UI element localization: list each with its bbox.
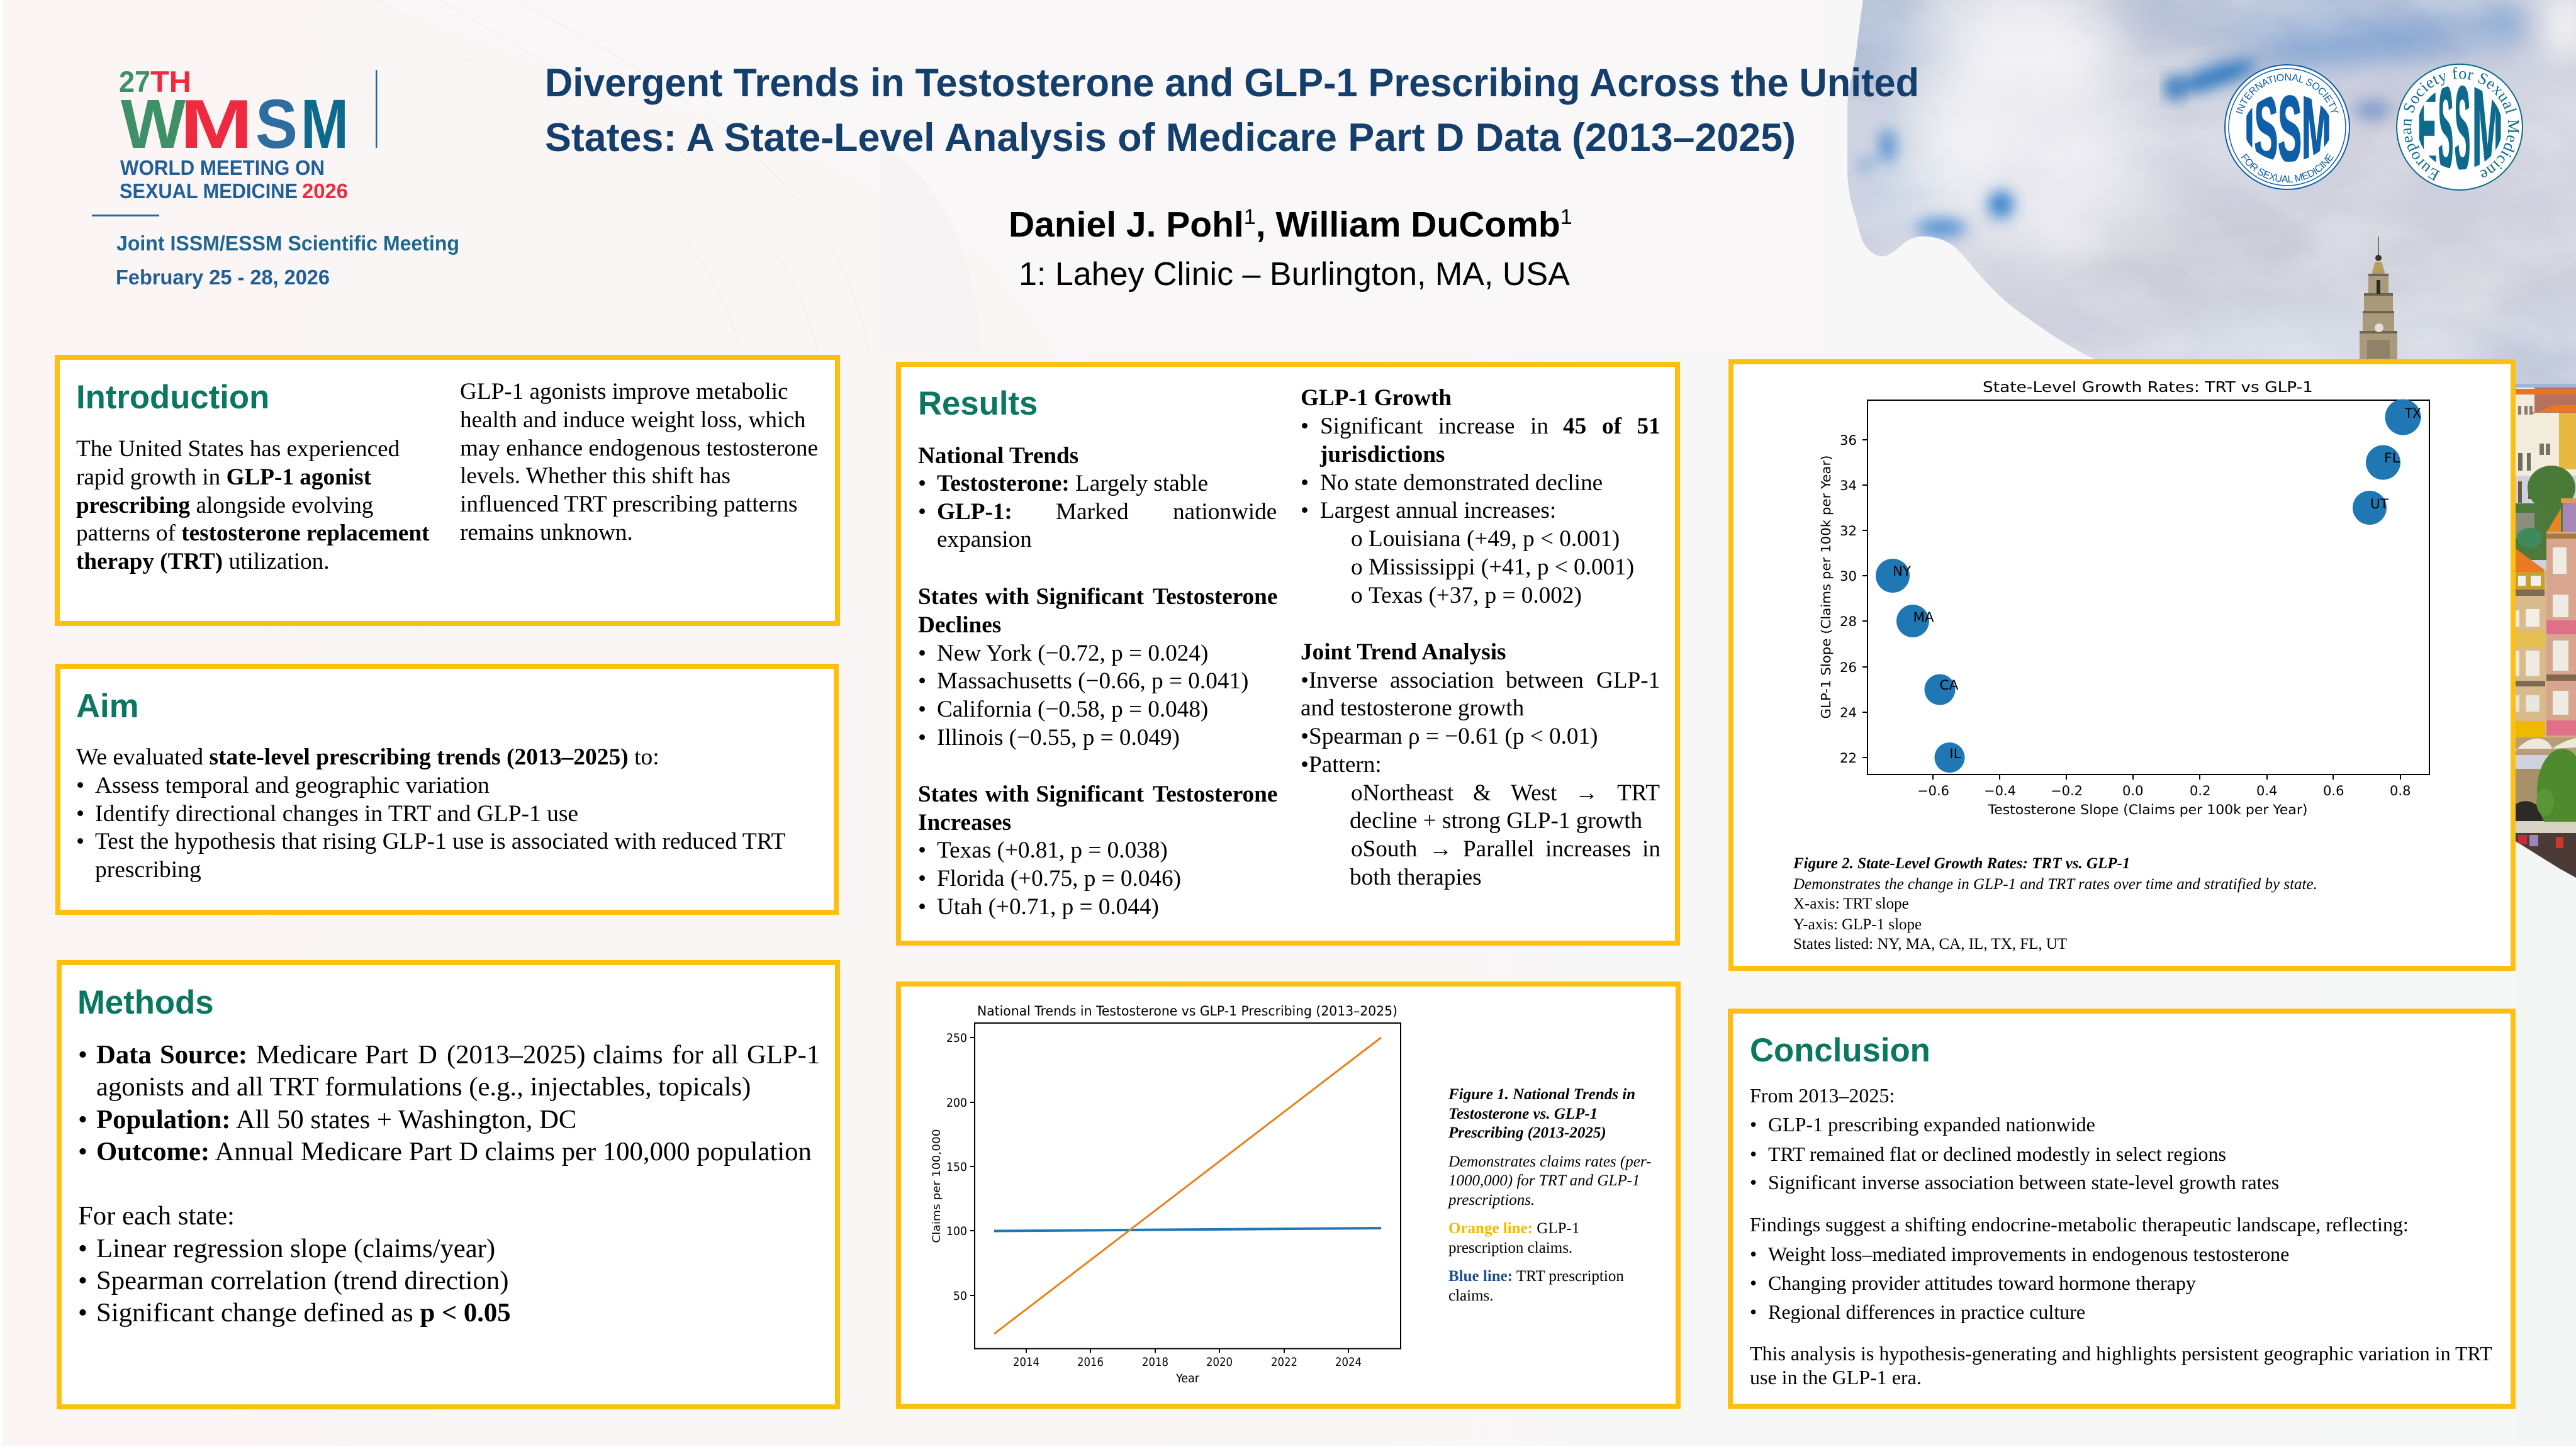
text: methods list: Medicare (256, 1040, 357, 1070)
scatter chart: state-level growth: 36 (1840, 433, 1857, 448)
conference logo: WMSM 2026: February 25 - 28, 2026 (116, 266, 330, 289)
line chart: national trends: 2016 (1077, 1356, 1104, 1369)
caption: figure 1: prescription claims. (1448, 1239, 1572, 1256)
text: aim list: • (76, 801, 84, 827)
text: conclusion body: • (1750, 1301, 1757, 1323)
caption: figure 1 (1447, 1086, 1651, 1304)
scatter chart: state-level growth: 0.8 (2390, 783, 2411, 798)
logo: ESSM: E (2417, 62, 2437, 196)
text: results right column: and testosterone growth (1301, 695, 1525, 721)
line chart: national trends: Claims per 100,000 (931, 1129, 943, 1243)
caption: figure 2: States listed: NY, MA, CA, IL, TX, FL, UT (1793, 936, 2067, 953)
panel: figure 2 (1731, 362, 2513, 968)
text: results right column: GLP-1 (1596, 668, 1660, 693)
text: introduction right column: may enhance endogenous testosterone (460, 435, 818, 461)
conference logo: WMSM 2026: WORLD MEETING ON (120, 156, 325, 179)
scatter chart: state-level growth: FL (2384, 450, 2400, 466)
caption: figure 2: Demonstrates the change in GLP-1 and TRT rates over time and stratified by state. (1793, 876, 2317, 893)
text: results right column: o (1351, 554, 1363, 580)
line chart: national trends (931, 1004, 1401, 1385)
panel: conclusion (1730, 1011, 2513, 1406)
scatter chart: state-level growth: UT (2370, 496, 2388, 512)
text: results right column: Significant (1320, 413, 1423, 439)
text: results left column: Largely stable (1075, 471, 1208, 496)
conference logo: WMSM 2026: S (255, 86, 298, 163)
text: results left column: Significant (1036, 781, 1145, 807)
text: results left column: • (918, 499, 926, 525)
caption: figure 1: Orange line: GLP-1 (1448, 1220, 1579, 1237)
logo: ISSM: FOR SEXUAL MEDICINE (2241, 154, 2334, 182)
text: results right column: No state demonstrated decline (1320, 470, 1603, 496)
text: methods list: • (78, 1105, 87, 1134)
text: results right column: West (1511, 780, 1557, 806)
text: results left column: Testosterone: (937, 471, 1070, 496)
panel: methods (59, 963, 837, 1407)
text: methods list: Data (96, 1040, 152, 1070)
logo: ISSM (2224, 64, 2350, 190)
text: methods list: • (78, 1234, 87, 1263)
text: results right column: • (1301, 498, 1309, 523)
text: results left column: Declines (918, 612, 1001, 638)
text: methods list: (2013–2025) (447, 1040, 586, 1070)
text: introduction right column: remains unknown. (460, 520, 633, 545)
panel: figure 1 (899, 984, 1678, 1406)
text: results right column: in (1530, 413, 1548, 439)
scatter chart: state-level growth: 0.6 (2323, 783, 2344, 798)
scatter chart: state-level growth: 24 (1840, 705, 1857, 720)
text: methods list: all (712, 1040, 739, 1070)
text: results left column: Testosterone (1153, 781, 1277, 807)
scatter chart: state-level growth: State-Level Growth Rates: TRT vs GLP-1 (1983, 379, 2313, 396)
scatter chart: state-level growth: 22 (1840, 751, 1857, 766)
text: aim list: We evaluated state-level prescribing trends (2013–2025) to: (76, 744, 659, 770)
church tower (2360, 237, 2397, 362)
text: conclusion body: TRT remained flat or declined modestly in select regions (1768, 1143, 2226, 1165)
text: results right column: • (1301, 470, 1309, 496)
scatter chart: state-level growth: −0.4 (1984, 783, 2016, 798)
authors: 1 (1560, 205, 1572, 229)
text: introduction left column: rapid growth in GLP-1 agonist (76, 464, 372, 490)
text: results right column: o (1351, 583, 1363, 608)
text: results right column: Largest annual increases: (1320, 498, 1556, 523)
text: aim list: • (76, 829, 84, 854)
text: methods list: agonists and all TRT formulations (e.g., injectables, topicals) (96, 1072, 751, 1102)
conference logo: WMSM 2026: TH (150, 65, 191, 98)
text: results left column: California (−0.58, p = 0.048) (937, 697, 1208, 722)
text: results left column: nationwide (1173, 499, 1277, 525)
scatter chart: state-level growth: TX (2404, 406, 2421, 421)
text: results right column: Parallel (1463, 836, 1535, 862)
conference logo: WMSM 2026: 2026 (302, 179, 348, 203)
scatter chart: state-level growth: 0.0 (2122, 783, 2143, 798)
scatter chart: state-level growth: IL (1949, 746, 1961, 761)
text: conclusion body: Regional differences in practice culture (1768, 1301, 2085, 1323)
text: methods list: For each state: (78, 1201, 235, 1231)
text: results left column: with (985, 781, 1029, 807)
text: results left column: Texas (+0.81, p = 0.038) (937, 837, 1168, 863)
conference logo: WMSM 2026: 27 (119, 65, 150, 98)
scatter chart: state-level growth: 32 (1840, 523, 1857, 539)
scatter chart: state-level growth: 30 (1840, 569, 1857, 584)
text: conclusion body: From 2013–2025: (1750, 1084, 1895, 1107)
scatter chart: state-level growth (1818, 379, 2429, 817)
text: results right column: decline + strong GLP-1 growth (1350, 808, 1642, 834)
caption: figure 1: Demonstrates claims rates (per- (1448, 1153, 1651, 1170)
text: results left column: Significant (1036, 584, 1145, 610)
text: conclusion body: GLP-1 prescribing expanded nationwide (1768, 1113, 2095, 1136)
text: introduction right column (460, 379, 818, 545)
affiliation: 1: Lahey Clinic – Burlington, MA, USA (1019, 256, 1570, 293)
conference logo: WMSM 2026: Joint ISSM/ESSM Scientific Meeting (116, 232, 459, 255)
text: results left column: States (918, 781, 978, 807)
title (545, 61, 1919, 160)
heading: results: Results (918, 385, 1038, 422)
text: introduction left column (76, 436, 430, 574)
text: results left column: • (918, 894, 926, 920)
conference logo: WMSM 2026: W (121, 86, 186, 163)
text: introduction left column: therapy (TRT) utilization. (76, 549, 330, 574)
scatter chart: state-level growth: 0.2 (2190, 783, 2211, 798)
text: results right column: •Pattern: (1301, 752, 1382, 778)
scatter chart: state-level growth: −0.6 (1917, 783, 1949, 798)
line chart: national trends: 100 (946, 1225, 967, 1238)
text: introduction left column: The United States has experienced (76, 436, 400, 462)
text: methods list: Source: (160, 1040, 247, 1070)
text: results left column: with (985, 584, 1029, 610)
text: conclusion body: use in the GLP-1 era. (1750, 1366, 1922, 1389)
text: results right column: 51 (1637, 413, 1660, 439)
line chart: national trends: 2024 (1335, 1356, 1362, 1369)
authors: Daniel J. Pohl (1009, 204, 1244, 245)
text: results right column: Louisiana (+49, p < 0.001) (1369, 526, 1620, 552)
line chart: national trends: Year (1175, 1372, 1199, 1385)
text: results left column: expansion (937, 527, 1032, 552)
line chart: national trends: National Trends in Testosterone vs GLP-1 Prescribing (2013–2025) (977, 1004, 1397, 1019)
text: methods list: p < 0.05 (420, 1298, 511, 1328)
text: methods list: Population: (96, 1105, 230, 1134)
text: results left column: • (918, 697, 926, 722)
line chart: national trends: 200 (946, 1097, 967, 1110)
text: results left column: Testosterone (1153, 584, 1277, 610)
text: results right column (1301, 385, 1660, 890)
text: results left column: GLP-1: (937, 499, 1012, 525)
text: aim list: Test the hypothesis that rising GLP-1 use is associated with reduced TRT (95, 829, 785, 854)
text: results right column: •Spearman ρ = −0.61 (p < 0.01) (1301, 724, 1598, 749)
caption: figure 2: X-axis: TRT slope (1793, 895, 1909, 912)
text: introduction left column: prescribing alongside evolving (76, 493, 373, 518)
text: results right column: increase (1438, 413, 1515, 439)
text: conclusion body: Significant inverse association between state-level growth rates (1768, 1171, 2279, 1194)
scatter chart: state-level growth: MA (1913, 610, 1934, 625)
text: results left column (918, 443, 1277, 920)
text: methods list: • (78, 1040, 87, 1070)
text: conclusion body: • (1750, 1143, 1757, 1165)
text: results left column: • (918, 837, 926, 863)
text: results right column: increases (1545, 836, 1631, 862)
text: results right column: both therapies (1350, 864, 1482, 890)
text: methods list: Spearman correlation (trend direction) (96, 1266, 508, 1295)
text: methods list: Annual Medicare Part D claims per 100,000 population (215, 1137, 812, 1166)
logo: ESSM: S (2438, 62, 2453, 196)
conference logo: WMSM 2026 (92, 65, 459, 289)
text: introduction right column: influenced TRT prescribing patterns (460, 491, 798, 517)
line chart: national trends: 250 (946, 1032, 967, 1045)
caption: figure 2 (1793, 855, 2317, 953)
text: results right column: TRT (1617, 780, 1660, 806)
text: methods list: Linear regression slope (claims/year) (96, 1234, 495, 1263)
line chart: national trends: 50 (953, 1290, 967, 1303)
text: conclusion body: Weight loss–mediated improvements in endogenous testosterone (1768, 1243, 2289, 1265)
text: introduction right column: GLP-1 agonists improve metabolic (460, 379, 788, 405)
authors: , William DuComb (1256, 204, 1560, 245)
caption: figure 1: Figure 1. National Trends in (1448, 1086, 1635, 1103)
panel: introduction (57, 357, 837, 624)
line chart: national trends: 2020 (1206, 1356, 1233, 1369)
text: introduction left column: patterns of testosterone replacement (76, 520, 430, 546)
text: methods list: Part (365, 1040, 408, 1070)
panel: aim (58, 666, 836, 912)
caption: figure 2: Figure 2. State-Level Growth Rates: TRT vs. GLP-1 (1793, 855, 2130, 872)
text: conclusion body: • (1750, 1113, 1757, 1136)
text: results right column: GLP-1 Growth (1301, 385, 1452, 411)
scatter chart: state-level growth: NY (1893, 564, 1911, 579)
text: results left column: Massachusetts (−0.66, p = 0.041) (937, 668, 1248, 694)
text: methods list: Significant change defined as (96, 1298, 420, 1328)
text: ISSM (2244, 77, 2331, 181)
text: methods list: Outcome: (96, 1137, 210, 1166)
text: conclusion body: • (1750, 1171, 1757, 1194)
logo: ESSM: European Society for Sexual Medicine (2404, 67, 2519, 181)
text: results left column: Florida (+0.75, p = 0.046) (937, 866, 1181, 892)
text: methods list: All 50 states + Washington, DC (236, 1105, 576, 1134)
scatter chart: state-level growth: Testosterone Slope (Claims per 100k per Year) (1987, 802, 2308, 817)
line chart: national trends: 2022 (1271, 1356, 1297, 1369)
authors (1009, 204, 1572, 293)
text: results right column: Texas (+37, p = 0.002) (1369, 583, 1582, 608)
panel: results (899, 364, 1677, 943)
text: results left column: New York (−0.72, p = 0.024) (937, 641, 1208, 666)
text: results left column: Illinois (−0.55, p = 0.049) (937, 725, 1180, 751)
heading: introduction: Introduction (76, 379, 269, 416)
authors: 1 (1244, 205, 1256, 229)
text: results left column: • (918, 866, 926, 892)
text: results right column: → (1429, 836, 1452, 862)
text: aim list (76, 744, 785, 883)
text: results left column: Marked (1056, 499, 1129, 525)
text: methods list: claims (593, 1040, 663, 1070)
text: results right column: oNortheast (1351, 780, 1453, 806)
logo: ESSM: S (2455, 62, 2470, 196)
text: methods list: • (78, 1137, 87, 1166)
caption: figure 1: prescriptions. (1447, 1192, 1535, 1209)
heading: methods: Methods (77, 984, 214, 1021)
scatter chart: state-level growth: 0.4 (2256, 783, 2278, 798)
text: conclusion body: Findings suggest a shifting endocrine-metabolic therapeutic landscape, reflecting: (1750, 1213, 2409, 1236)
text: aim list: Assess temporal and geographic variation (95, 773, 490, 798)
scatter chart: state-level growth: 26 (1840, 660, 1857, 675)
conference logo: WMSM 2026: M (301, 86, 349, 163)
text: results right column: in (1642, 836, 1660, 862)
text: results right column: jurisdictions (1319, 442, 1445, 467)
caption: figure 1: 1000,000) for TRT and GLP-1 (1448, 1172, 1640, 1189)
text: results right column: → (1575, 780, 1598, 806)
heading: conclusion: Conclusion (1750, 1032, 1930, 1069)
logo: ESSM: M (2472, 62, 2503, 196)
text: aim list: Identify directional changes in TRT and GLP-1 use (95, 801, 578, 827)
text: aim list: prescribing (95, 857, 201, 883)
title: States: A State-Level Analysis of Medicare Part D Data (2013–2025) (545, 116, 1796, 160)
text: results right column: of (1602, 413, 1622, 439)
text: results right column: & (1473, 780, 1491, 806)
text: results right column: oSouth (1351, 836, 1417, 862)
text: results right column: association (1390, 668, 1494, 693)
text: methods list: • (78, 1266, 87, 1295)
conference logo: WMSM 2026: SEXUAL MEDICINE (120, 179, 298, 203)
sky photo with clouds (1825, 0, 2576, 881)
text: results right column: •Inverse (1301, 668, 1377, 693)
text: conclusion body: This analysis is hypothesis-generating and highlights persistent geographic variation in TRT (1750, 1342, 2492, 1365)
line chart: national trends: 150 (946, 1161, 967, 1174)
scatter chart: state-level growth: −0.2 (2051, 783, 2083, 798)
heading: aim: Aim (76, 688, 139, 725)
text: results left column: Utah (+0.71, p = 0.044) (937, 894, 1159, 920)
text: results left column: States (918, 584, 978, 610)
text: results right column: Joint Trend Analysis (1301, 639, 1506, 665)
text: results left column: • (918, 471, 926, 496)
text: results right column: • (1301, 413, 1309, 439)
text: results left column: National Trends (918, 443, 1078, 469)
logo: ISSM: INTERNATIONAL SOCIETY (2236, 73, 2339, 115)
scatter chart: state-level growth: CA (1939, 678, 1959, 693)
caption: figure 2: Y-axis: GLP-1 slope (1793, 916, 1922, 933)
title: Divergent Trends in Testosterone and GLP-1 Prescribing Across the United (545, 61, 1919, 105)
scatter chart: state-level growth: GLP-1 Slope (Claims per 100k per Year) (1818, 456, 1834, 719)
text: results left column: • (918, 725, 926, 751)
scatter chart: state-level growth: 28 (1840, 614, 1857, 629)
text: introduction right column: health and induce weight loss, which (460, 407, 806, 433)
text: methods list: • (78, 1298, 87, 1328)
text: conclusion body: • (1750, 1272, 1757, 1294)
caption: figure 1: Prescribing (2013-2025) (1448, 1124, 1606, 1141)
text: introduction right column: levels. Whether this shift has (460, 463, 731, 489)
text: aim list: • (76, 773, 84, 798)
text: results right column: o (1351, 526, 1363, 552)
town buildings photo strip (2516, 384, 2576, 883)
line chart: national trends: 2014 (1013, 1356, 1039, 1369)
line chart: national trends: 2018 (1142, 1356, 1168, 1369)
caption: figure 1: Testosterone vs. GLP-1 (1448, 1105, 1598, 1122)
text: results left column: • (918, 641, 926, 666)
text: conclusion body (1750, 1084, 2492, 1389)
text: methods list: for (672, 1040, 703, 1070)
text: conclusion body: • (1750, 1243, 1757, 1265)
text: results right column: Mississippi (+41, p < 0.001) (1369, 554, 1634, 580)
scatter chart: state-level growth: 34 (1840, 478, 1857, 493)
text: results left column: • (918, 668, 926, 694)
text: results right column: between (1506, 668, 1584, 693)
caption: figure 1: Blue line: TRT prescription (1448, 1268, 1624, 1285)
text: results right column: 45 (1563, 413, 1586, 439)
text: results left column: Increases (918, 810, 1011, 836)
conference logo: WMSM 2026: M (180, 86, 253, 163)
caption: figure 1: claims. (1448, 1287, 1494, 1304)
text: methods list: D (418, 1040, 437, 1070)
text: methods list (78, 1040, 820, 1328)
text: methods list: GLP-1 (747, 1040, 820, 1070)
text: conclusion body: Changing provider attitudes toward hormone therapy (1768, 1272, 2196, 1294)
